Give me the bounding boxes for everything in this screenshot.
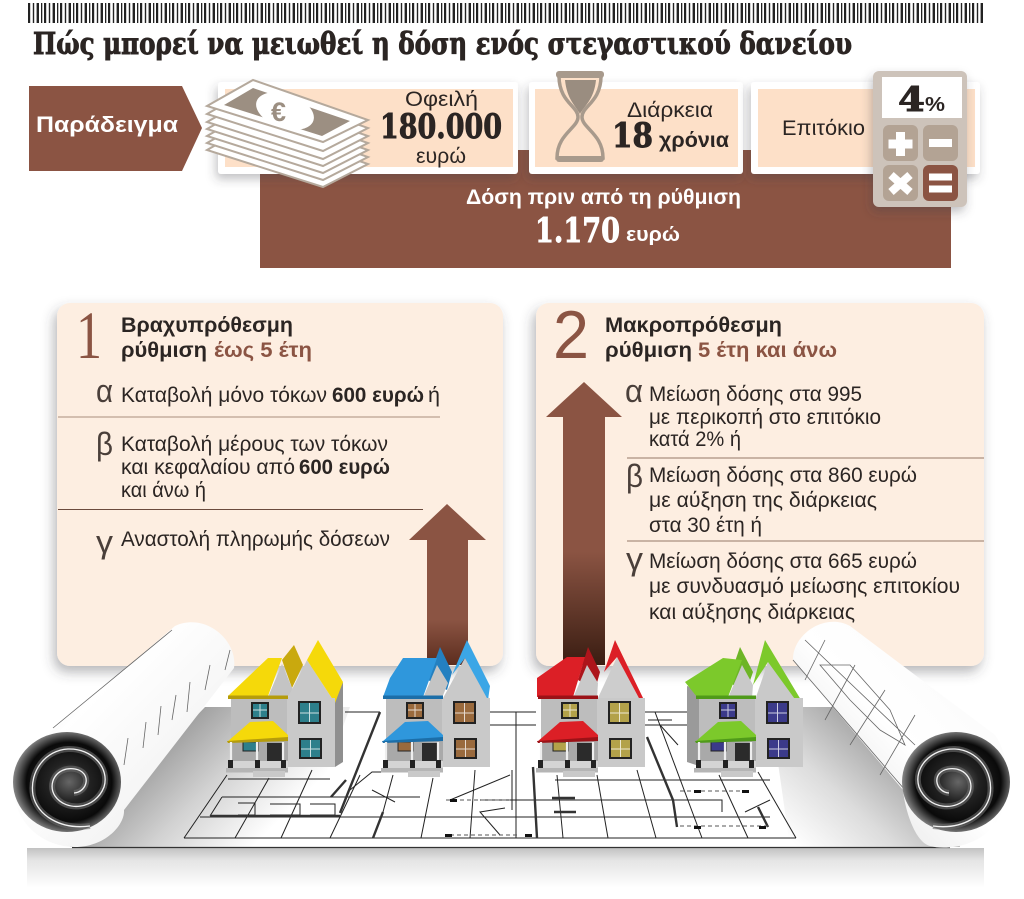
icon: hourglass — [556, 71, 604, 162]
option a line 2: με περικοπή στο επιτόκιο — [649, 406, 881, 429]
arrow: long term — [546, 382, 622, 665]
option a letter: α — [625, 373, 643, 409]
floor plan drawing — [184, 712, 796, 838]
example arrow tag — [29, 86, 202, 171]
house: blue — [381, 640, 490, 777]
unit: euros: ευρώ — [626, 224, 680, 246]
title: Πώς μπορεί να μειωθεί η δόση ενός στεγαστικού δανείου — [33, 27, 852, 62]
interest label: Επιτόκιο — [782, 117, 865, 140]
debt label: Οφειλή — [405, 88, 478, 111]
option c line 2: με συνδυασμό μείωσης επιτοκίου — [649, 575, 960, 598]
top barcode rule — [28, 3, 984, 23]
debt unit: ευρώ — [416, 145, 466, 168]
icon: stack of euro notes: € — [271, 97, 286, 127]
panel 2: long term adjustment — [536, 297, 984, 666]
option a letter: α — [96, 373, 113, 409]
option c line 3: και αύξησης διάρκειας — [649, 601, 855, 624]
option a amount: 600 ευρώ — [332, 384, 424, 407]
house: green — [685, 640, 803, 777]
duration value: 18 — [612, 116, 653, 156]
option b amount: 600 ευρώ — [299, 456, 390, 479]
value: 1.170: 1.170 — [535, 211, 620, 251]
option b line 1: Καταβολή μέρους των τόκων — [121, 433, 388, 456]
option b line 3: στα 30 έτη ή — [649, 514, 762, 537]
heading line 2: ρύθμιση — [121, 339, 207, 362]
option b line 2: και κεφαλαίου από — [121, 456, 295, 479]
right paper roll — [793, 622, 1010, 848]
option b line 3: και άνω ή — [121, 479, 206, 502]
duration unit: χρόνια — [659, 129, 729, 152]
option a line 1: Μείωση δόσης στα 995 — [649, 383, 862, 406]
heading: Βραχυπρόθεσμη — [121, 314, 293, 337]
card: debt — [218, 82, 518, 174]
card: duration — [529, 82, 743, 174]
card: interest rate — [751, 82, 980, 174]
option b line 1: Μείωση δόσης στα 860 ευρώ — [649, 464, 917, 487]
number 2: 2 — [553, 297, 589, 373]
option a line 3: κατά 2% ή — [649, 428, 741, 451]
option a or: ή — [428, 384, 440, 407]
heading line 2: ρύθμιση — [605, 339, 692, 362]
left paper roll — [13, 622, 234, 847]
option a text: Καταβολή μόνο τόκων — [121, 384, 327, 407]
option c line 1: Μείωση δόσης στα 665 ευρώ — [649, 550, 917, 573]
house: red — [536, 640, 645, 777]
house: yellow — [226, 640, 343, 777]
option b letter: β — [626, 458, 643, 494]
option c letter: γ — [626, 541, 643, 577]
heading: Μακροπρόθεσμη — [605, 314, 782, 337]
rate value: 4 — [898, 80, 925, 120]
icon: calculator — [873, 71, 967, 207]
option c text: Αναστολή πληρωμής δόσεων — [121, 528, 390, 551]
panel 1: short term adjustment — [57, 297, 503, 666]
example label: Παράδειγμα — [36, 112, 179, 137]
duration label: Διάρκεια — [627, 99, 713, 122]
number 1: 1 — [76, 297, 102, 373]
icon: stack of euro notes — [207, 80, 368, 187]
debt value: 180.000 — [380, 107, 502, 147]
percent sign: % — [925, 94, 945, 116]
panel: monthly instalment before adjustment — [260, 150, 951, 268]
arrow: short term — [409, 504, 486, 665]
option b letter: β — [96, 426, 113, 462]
blueprint sheet with floor shadow — [27, 707, 984, 888]
label: instalment: Δόση πριν από τη ρύθμιση — [466, 186, 741, 209]
option c letter: γ — [96, 524, 113, 560]
option b line 2: με αύξηση της διάρκειας — [649, 489, 877, 512]
heading highlight: 5 έτη και άνω — [698, 339, 837, 362]
heading highlight: έως 5 έτη — [214, 339, 312, 362]
